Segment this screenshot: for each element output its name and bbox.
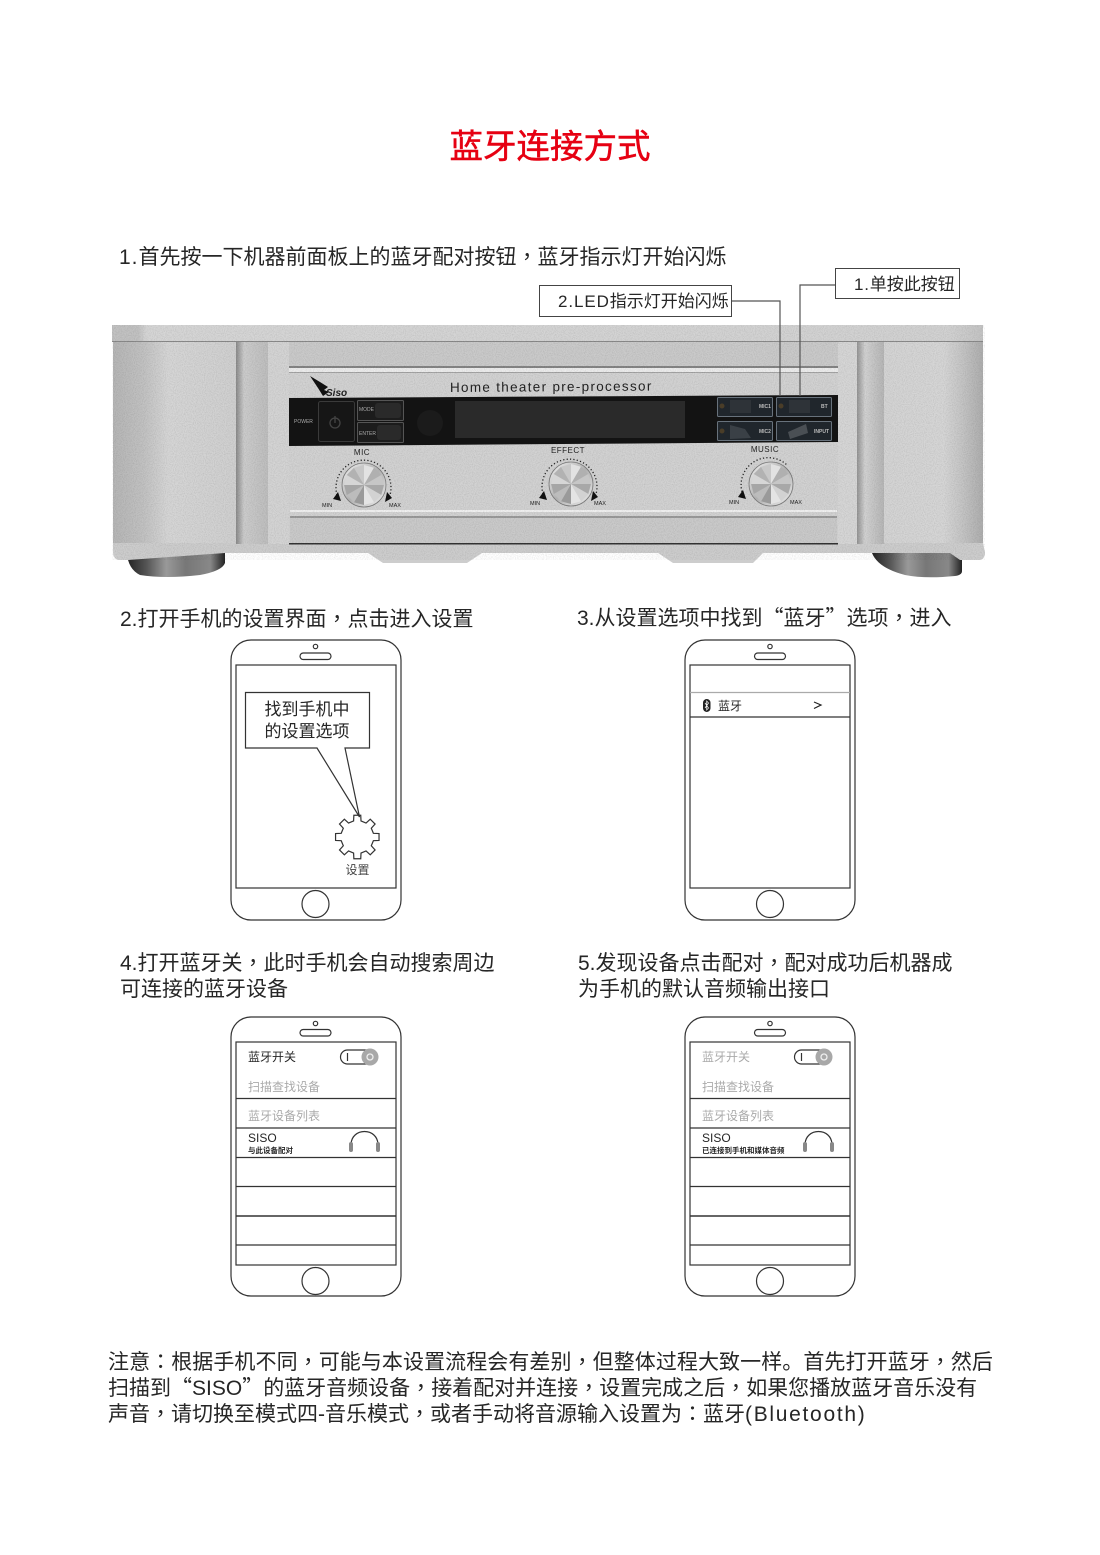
device logo: Siso [326, 388, 347, 399]
list label: 蓝牙设备列表 [702, 1109, 774, 1123]
icon: headphones [349, 1132, 380, 1152]
toggle [340, 1048, 378, 1066]
device centre panel [289, 341, 838, 544]
enter button [358, 422, 404, 442]
step 2 text: 2.打开手机的设置界面，点击进入设置 [120, 603, 474, 633]
BT button [776, 398, 832, 416]
knob: MUSIC [729, 445, 802, 506]
knob: EFFECT: EFFECT [551, 446, 585, 455]
device side block right [884, 341, 983, 543]
callout: LED indicator [540, 286, 780, 396]
knob: MIC: MIN [322, 503, 332, 509]
bluetooth row label: 蓝牙 [718, 699, 742, 713]
note text: 注意：根据手机不同，可能与本设置流程会有差别，但整体过程大致一样。首先打开蓝牙，然后 [108, 1346, 993, 1376]
device row SISO: 与此设备配对 [248, 1145, 293, 1155]
knob: MUSIC: MIN [729, 500, 739, 506]
list label: 蓝牙设备列表 [248, 1109, 320, 1123]
step 3 text: 3.从设置选项中找到“蓝牙”选项，进入 [577, 602, 952, 632]
device side block left [113, 341, 236, 543]
INPUT button [776, 422, 832, 440]
callout: press button: 1.单按此按钮 [854, 275, 955, 294]
note text: 声音，请切换至模式四-音乐模式，或者手动将音源输入设置为：蓝牙(Bluetooth) [108, 1398, 866, 1428]
MIC2 button: MIC2 [759, 429, 771, 435]
phone: step 4 pairing [231, 1017, 401, 1296]
mode button: MODE [359, 407, 375, 413]
device row SISO [248, 1131, 293, 1155]
device top plate [112, 325, 983, 341]
knob: MIC [322, 448, 401, 509]
device row SISO: 已连接到手机和媒体音频 [702, 1145, 785, 1155]
gear label: 设置 [345, 863, 370, 877]
device base with lower bumps [113, 543, 985, 563]
phone: step 2 settings [231, 640, 401, 920]
knob: MUSIC: MAX [790, 500, 802, 506]
scan label: 扫描查找设备 [702, 1080, 774, 1094]
device groove left [236, 341, 268, 544]
step 5 text: 5.发现设备点击配对，配对成功后机器成 [578, 947, 953, 977]
INPUT button: INPUT [814, 429, 829, 435]
mode button [358, 400, 404, 420]
knob: MIC: MIC [354, 448, 370, 457]
phone: step 5 connected [685, 1017, 855, 1296]
MIC1 button: MIC1 [759, 404, 771, 410]
knob: EFFECT: MIN [530, 501, 540, 507]
power button: POWER [294, 419, 313, 425]
device photo: pre-processor front panel [112, 325, 985, 577]
note text [108, 1346, 993, 1428]
icon: settings gear [336, 815, 379, 859]
device row SISO [702, 1131, 785, 1155]
display window [455, 401, 685, 438]
note text: 扫描到“SISO”的蓝牙音频设备，接着配对并连接，设置完成之后，如果您播放蓝牙音乐没有 [108, 1372, 977, 1402]
step 1 text: 1.首先按一下机器前面板上的蓝牙配对按钮，蓝牙指示灯开始闪烁 [119, 241, 727, 271]
knob: MUSIC: MUSIC [751, 445, 779, 454]
black control band [289, 395, 838, 446]
callout bubble [246, 692, 370, 817]
scan label: 扫描查找设备 [248, 1080, 320, 1094]
knob: EFFECT: MAX [594, 501, 606, 507]
callout: press button [800, 268, 960, 396]
step 5 text: 为手机的默认音频输出接口 [578, 978, 830, 1001]
knob: EFFECT [530, 446, 606, 507]
power button [294, 402, 354, 442]
step 4 text [120, 947, 495, 1001]
bluetooth switch label: 蓝牙开关 [702, 1050, 750, 1064]
toggle [794, 1048, 832, 1066]
icon: headphones [803, 1132, 834, 1152]
device logo [310, 376, 347, 399]
icon: bluetooth [703, 699, 710, 712]
BT button: BT [821, 404, 828, 410]
MIC1 button [718, 398, 772, 416]
enter button: ENTER [359, 431, 376, 437]
title: 蓝牙连接方式 [450, 129, 650, 166]
knob: MIC: MAX [389, 503, 401, 509]
arrow [814, 702, 821, 708]
device groove right [838, 341, 857, 544]
device row SISO: SISO [248, 1131, 277, 1145]
device model name: Home theater pre-processor [450, 379, 653, 395]
device row SISO: SISO [702, 1131, 731, 1145]
callout bubble: 找到手机中 [264, 700, 350, 719]
callout: LED indicator: 2.LED指示灯开始闪烁 [558, 292, 729, 311]
texture overlay [112, 325, 985, 560]
device feet [127, 553, 962, 577]
phone: step 3 bluetooth option [685, 640, 855, 920]
MIC2 button [718, 422, 772, 440]
step 4 text: 可连接的蓝牙设备 [120, 978, 288, 1001]
step 4 text: 4.打开蓝牙关，此时手机会自动搜索周边 [120, 947, 495, 977]
callout bubble: 的设置选项 [264, 722, 350, 741]
bluetooth switch label: 蓝牙开关 [248, 1050, 296, 1064]
step 5 text [578, 947, 953, 1001]
